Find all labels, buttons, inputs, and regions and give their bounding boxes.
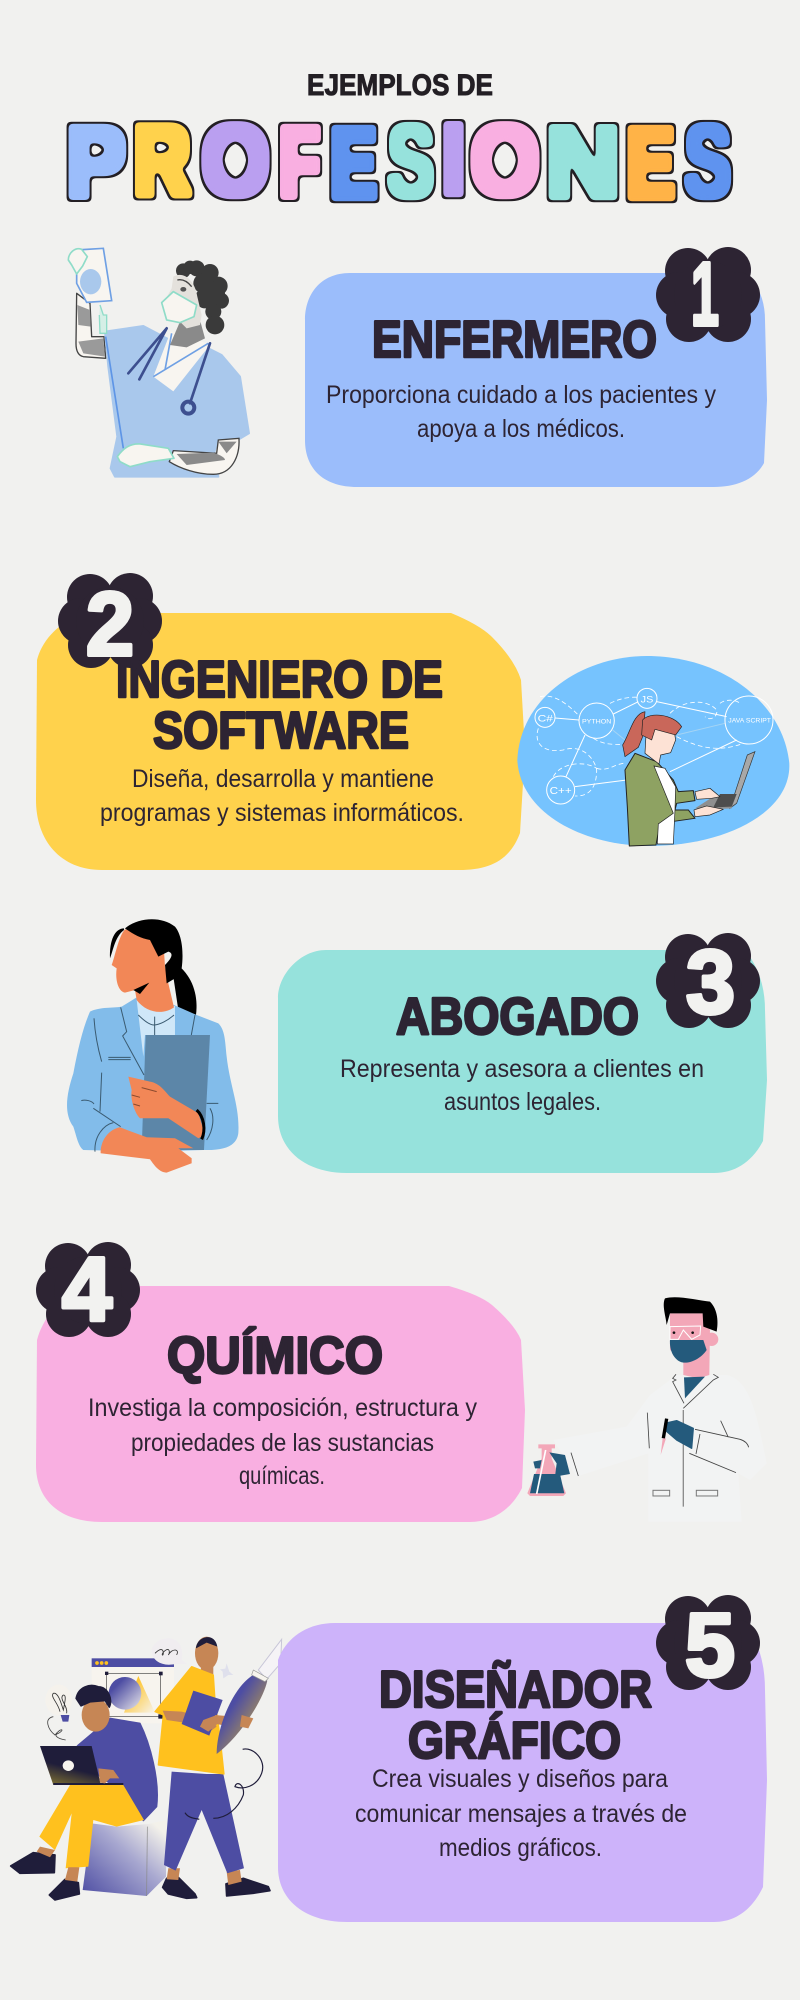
description: Representa y asesora a clientes en [340, 1055, 704, 1083]
description [326, 381, 716, 443]
card background [305, 273, 767, 487]
design window [92, 1658, 174, 1723]
sparkle [220, 1663, 233, 1678]
heading: Profesiones: F [280, 107, 319, 217]
description [355, 1765, 687, 1862]
heading: ENFERMERO [372, 311, 657, 369]
illustration: nurse [68, 248, 249, 477]
description: Diseña, desarrolla y mantiene [132, 765, 434, 793]
illustration: software developer: JAVA SCRIPT [728, 717, 771, 724]
number badge 2: 2 [86, 575, 134, 675]
card background [278, 950, 767, 1173]
heading: Profesiones: E [331, 108, 376, 218]
heading [116, 651, 443, 760]
seated man [11, 1685, 157, 1900]
number badge 3 [656, 933, 760, 1033]
card background [36, 613, 525, 870]
heading: ABOGADO [396, 988, 639, 1046]
description [340, 1055, 704, 1116]
description: programas y sistemas informáticos. [100, 799, 464, 827]
subtitle: Ejemplos de: EJEMPLOS DE [307, 69, 493, 102]
title block [67, 69, 730, 218]
illustration: software developer [517, 656, 789, 846]
description: comunicar mensajes a través de [355, 1800, 687, 1828]
illustration: software developer: C++ [550, 786, 572, 797]
number badge 1: 1 [691, 245, 719, 345]
description [100, 765, 464, 827]
heading: Profesiones: E [627, 108, 674, 218]
heading: Profesiones: O [471, 105, 539, 215]
description: asuntos legales. [444, 1088, 601, 1116]
panel: ingeniero de software [36, 573, 525, 870]
card background [278, 1623, 767, 1922]
stone block [83, 1820, 167, 1896]
description: Proporciona cuidado a los pacientes y [326, 381, 716, 409]
description: medios gráficos. [439, 1834, 602, 1862]
description: apoya a los médicos. [417, 415, 625, 443]
heading: Profesiones: I [442, 104, 465, 214]
heading: Profesiones: N [546, 107, 620, 217]
number badge 5 [656, 1595, 760, 1696]
heading: DISEÑADOR [379, 1660, 652, 1719]
card background [36, 1286, 525, 1522]
number badge 4 [36, 1240, 140, 1340]
number badge 4: 4 [62, 1240, 112, 1340]
swirl [185, 1749, 263, 1819]
light bulb [45, 1685, 72, 1740]
description [88, 1394, 477, 1490]
description: propiedades de las sustancias [131, 1429, 434, 1457]
description: químicas. [239, 1462, 325, 1490]
number badge 5: 5 [685, 1596, 735, 1696]
heading: GRÁFICO [408, 1712, 621, 1770]
panel: químico [36, 1240, 525, 1522]
heading: Profesiones: R [134, 105, 190, 215]
illustration: software developer: PYTHON [582, 718, 612, 725]
heading: Profesiones: O [202, 105, 269, 215]
heading: Profesiones: S [388, 106, 433, 216]
description: Crea visuales y diseños para [372, 1765, 668, 1793]
illustration: software developer: C# [538, 713, 554, 723]
heading: Profesiones [67, 104, 730, 218]
standing man [155, 1637, 282, 1898]
illustration: chemist [527, 1297, 767, 1522]
panel: enfermero [305, 245, 767, 487]
number badge 2 [58, 573, 162, 675]
panel: diseñador gráfico [278, 1595, 767, 1922]
heading: QUÍMICO [167, 1327, 383, 1385]
heading: INGENIERO DE [116, 651, 443, 709]
heading [379, 1660, 652, 1770]
illustration: graphic designers [11, 1637, 282, 1900]
illustration: software developer: JS [641, 694, 653, 704]
heading: SOFTWARE [153, 702, 409, 760]
illustration: lawyer [67, 919, 239, 1173]
heading: Profesiones: S [685, 106, 730, 216]
description: Investiga la composición, estructura y [88, 1394, 477, 1422]
number badge 3: 3 [686, 933, 735, 1033]
panel: abogado [278, 933, 767, 1173]
number badge 1 [656, 245, 760, 345]
speech bubble [152, 1638, 187, 1665]
heading: Profesiones: P [67, 107, 125, 217]
